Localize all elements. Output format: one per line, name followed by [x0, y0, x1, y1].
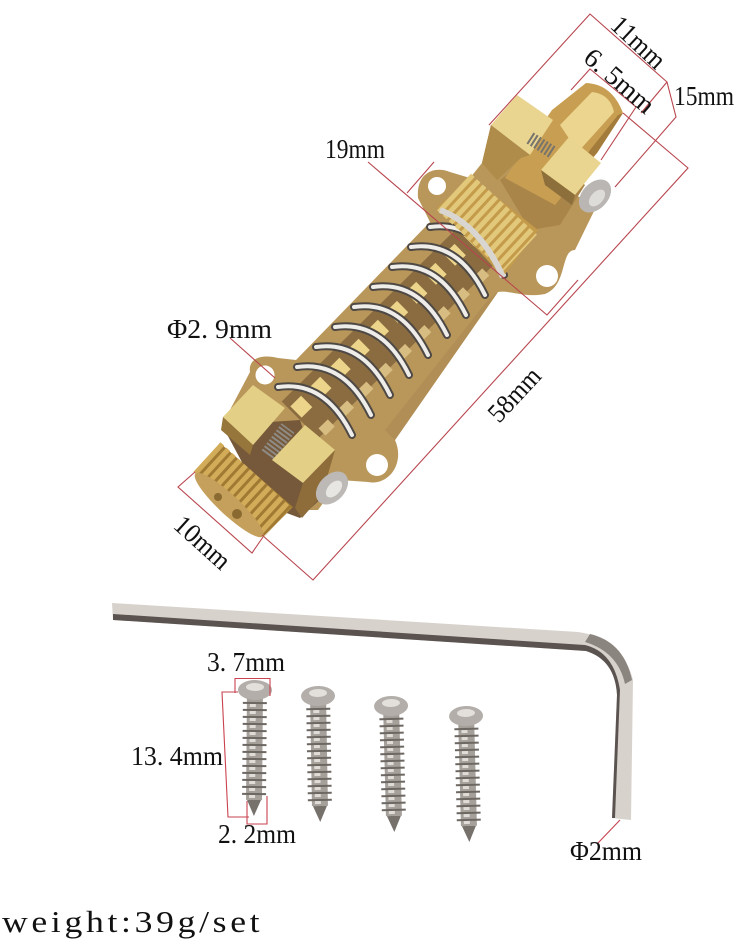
label: 6.5mm: 6. 5mm [578, 42, 661, 120]
label: 10mm: 10mm [168, 509, 237, 576]
top knurled wheel [438, 177, 538, 277]
spring coils [278, 226, 504, 435]
label: 19mm: 19mm [325, 134, 385, 164]
screw 2 [301, 686, 337, 822]
screw 1 [237, 680, 272, 816]
brass saddle assembly [189, 83, 623, 544]
label: diameter 2mm: Φ2mm [570, 836, 642, 866]
screw 4 [449, 706, 486, 842]
bottom silver screw head [310, 465, 354, 511]
top silver screw head [573, 173, 617, 219]
label: diameter 2.9mm: Φ2. 9mm [167, 314, 272, 344]
central brass shaft [296, 226, 498, 432]
label: 3.7mm: 3. 7mm [207, 647, 285, 677]
label: 2.2mm: 2. 2mm [218, 819, 296, 849]
dimension lines on screws and wrench [222, 678, 620, 843]
hex wrench [112, 603, 633, 820]
wrench dark lower edge [113, 614, 620, 818]
top brass cylinder [505, 83, 623, 205]
bottom adjustment nuts [221, 385, 335, 518]
weight caption: weight:39g/set [2, 905, 260, 939]
base plate with mounting eyes [222, 125, 597, 518]
label: 11mm: 11mm [605, 9, 672, 75]
label: 58mm: 58mm [481, 361, 547, 428]
label: 13.4mm: 13. 4mm [131, 741, 223, 771]
bottom knurled wheel [189, 443, 293, 544]
dimension lines on the saddle [178, 14, 688, 580]
screw 3 [374, 696, 411, 832]
top adjustment nuts [482, 95, 601, 205]
wrench body [112, 603, 633, 820]
wrench bend shading [585, 634, 632, 684]
